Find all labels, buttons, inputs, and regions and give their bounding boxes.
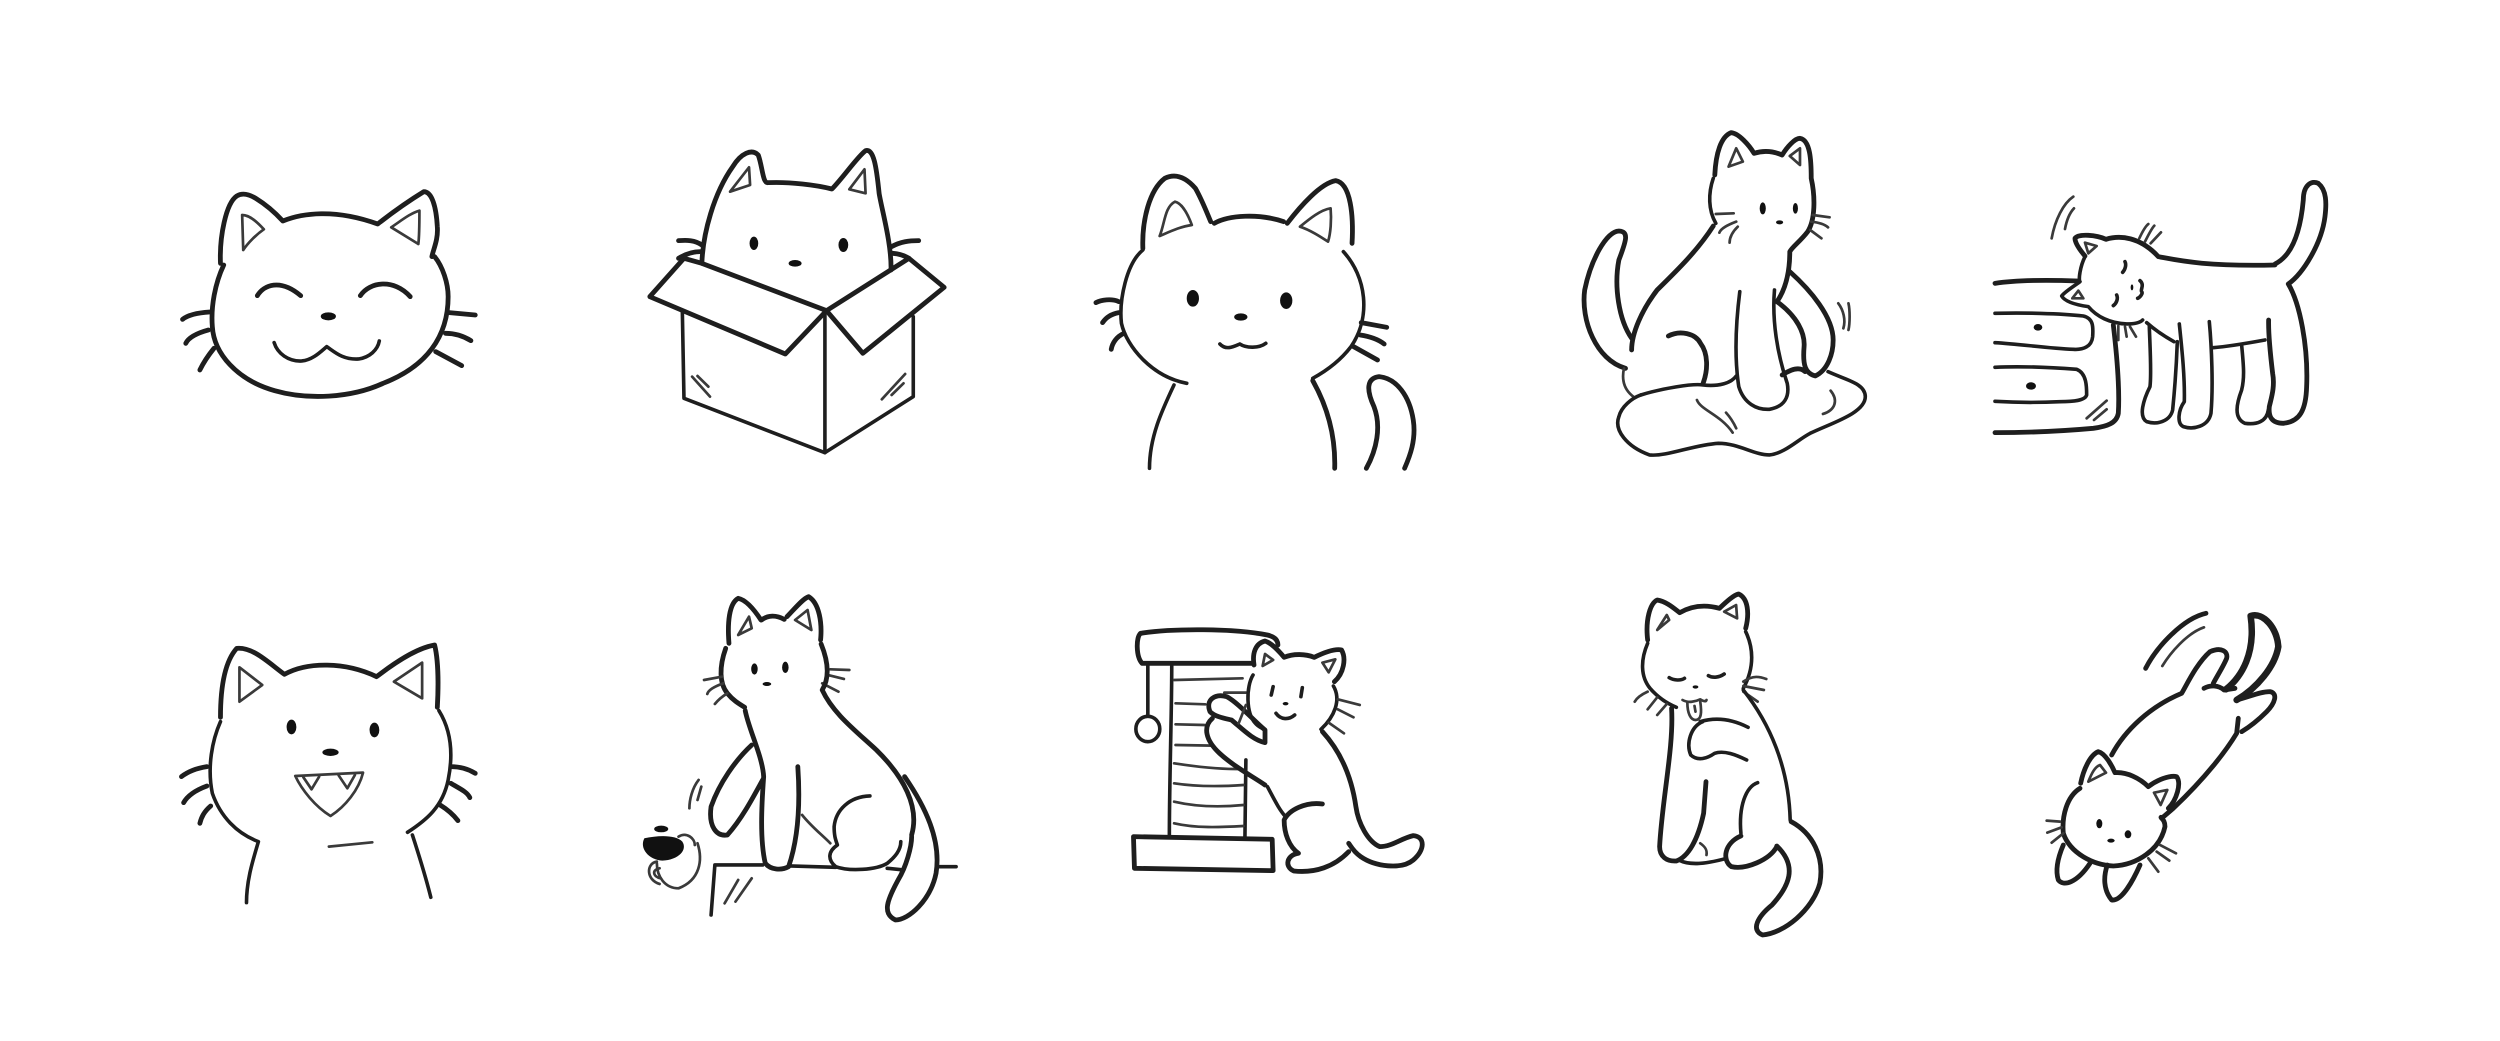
icon: cat with neutral face and tail [1096,176,1414,468]
ears inner [242,211,419,250]
scratching post [1133,630,1278,871]
face with fangs [287,720,379,847]
icon: cat sitting on cushion [1584,133,1865,455]
cat head [1248,641,1360,733]
cat body [2052,182,2326,423]
drawer unit [1995,280,2119,433]
body and tail [1660,690,1821,935]
icon: smiling cat face [183,192,475,396]
cat body and tail [711,644,937,920]
icon: cat at scratching post [1133,630,1422,871]
head [1643,594,1752,707]
cat head outline [212,192,448,396]
icon: cat licking paw [1635,594,1821,935]
body and tail [1149,377,1414,468]
box [650,258,944,453]
whiskers [181,767,475,823]
happy face [257,284,410,361]
motion lines [2146,613,2206,668]
legs [1668,272,1833,409]
cushion [1618,303,1865,455]
cat legs [2142,322,2268,428]
cat paws and body [1207,696,1422,871]
cat head [679,150,919,270]
icon: cat stretching diagonally [2047,613,2278,900]
icon: cat with open mouth and fangs [181,645,475,903]
head [2047,752,2179,872]
icon: cat rubbing head on drawer [1995,182,2326,433]
head and back [1632,133,1830,350]
falling coffee mug [643,780,701,888]
body and tail [2057,615,2278,900]
tail [1584,231,1634,397]
icon: cat pushing mug off table [643,597,956,920]
icon: cat in cardboard box [650,150,944,453]
head [1121,176,1364,383]
cat head [704,597,849,707]
whiskers [1096,300,1387,360]
face and tongue [1635,674,1766,720]
table edge [711,865,956,915]
whiskers [183,312,475,370]
head [210,645,451,903]
